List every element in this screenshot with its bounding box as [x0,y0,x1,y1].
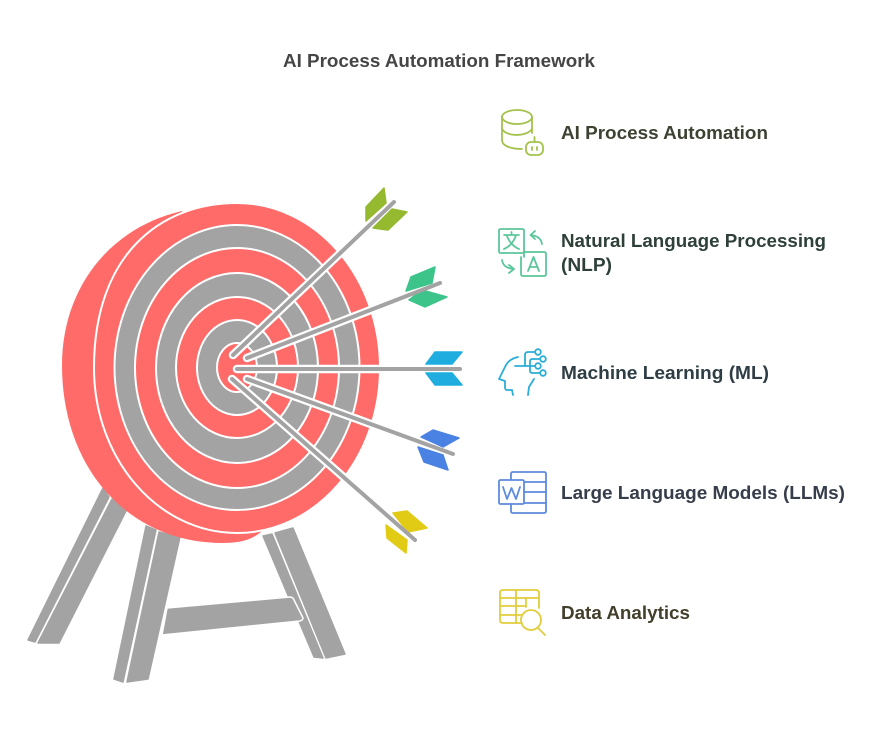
label: Natural Language Processing (NLP): (NLP) [561,255,612,275]
crossbar [162,597,303,635]
left leg [28,488,126,643]
middle leg [114,526,180,682]
icon: translation [499,229,546,276]
icon: table with magnifier [500,590,545,635]
icon: database with robot [502,110,543,155]
arrow: blue [247,379,459,470]
arrow: green [233,188,407,355]
label: Data Analytics: Data Analytics [561,603,690,623]
arrow: yellow [232,379,427,553]
right leg [263,528,345,658]
label: AI Process Automation: AI Process Automation [561,123,768,143]
label: Machine Learning (ML): Machine Learning (ML) [561,363,769,383]
arrow: teal [247,267,447,358]
label: Natural Language Processing (NLP) [561,231,826,275]
title: AI Process Automation Framework [283,51,596,71]
icon: head with circuits [499,349,546,395]
label: Natural Language Processing (NLP): Natural Language Processing [561,231,826,251]
arrow: sky blue [237,352,462,385]
arrows [232,188,462,553]
label: Large Language Models (LLMs): Large Language Models (LLMs) [561,483,845,503]
icon: word document table [499,472,546,513]
target board [62,203,380,543]
back disc [62,211,262,543]
target stand [28,488,345,682]
front disc rings [94,203,380,533]
